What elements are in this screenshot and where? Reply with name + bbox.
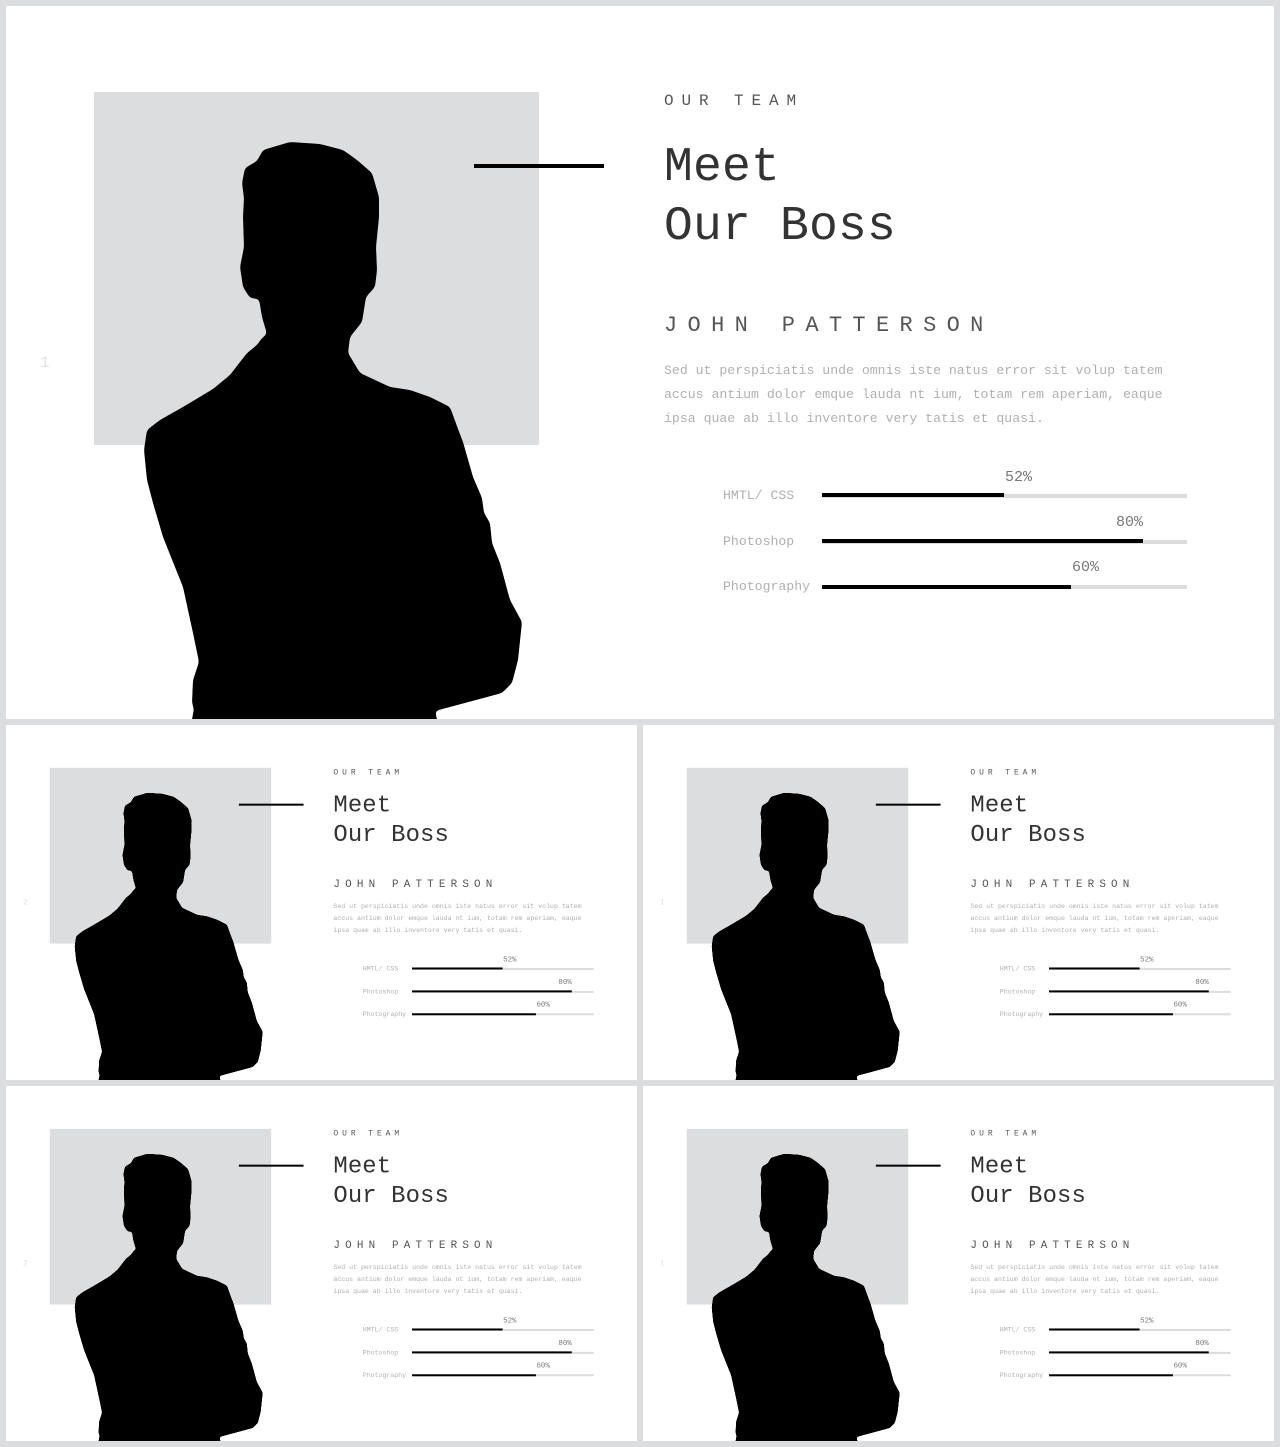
description text — [333, 903, 582, 934]
accent rule — [474, 164, 604, 168]
description text: ipsa quae ab illo inventore very tatis et quasi. — [664, 410, 1044, 426]
skill bar: Photoshop 80% — [1049, 1351, 1209, 1353]
silhouette of man — [712, 1154, 900, 1441]
skill track: Photoshop — [1049, 991, 1231, 993]
heading: Our Boss — [970, 822, 1086, 848]
grey backdrop rectangle — [687, 1129, 908, 1305]
skill label: Photoshop: Photoshop — [723, 534, 794, 549]
description text: Sed ut perspiciatis unde omnis iste natus error sit volup tatem — [970, 1264, 1219, 1271]
skill value: 80%: 80% — [1195, 978, 1209, 986]
skill track: Photography — [412, 1374, 594, 1376]
panel: small slide bottom left — [6, 1086, 637, 1441]
heading: Our Boss — [664, 200, 896, 254]
accent rule — [876, 1165, 941, 1167]
skill bar: HTML/CSS 52% — [412, 1328, 503, 1330]
panel: small slide top left — [6, 725, 637, 1080]
accent rule — [239, 804, 304, 806]
description text — [333, 1264, 582, 1295]
skill bar: Photography 60% — [1049, 1374, 1173, 1376]
description text: accus antium dolor emque lauda nt ium, totam rem aperiam, eaque — [664, 386, 1163, 402]
grey backdrop rectangle — [94, 92, 539, 445]
person name: JOHN PATTERSON — [333, 1239, 497, 1251]
skill value: 80%: 80% — [558, 1339, 572, 1347]
skill value: 80%: 80% — [558, 978, 572, 986]
skill track: HTML/CSS — [1049, 1329, 1231, 1331]
description text: accus antium dolor emque lauda nt ium, totam rem aperiam, eaque — [333, 914, 582, 922]
description text — [664, 362, 1163, 426]
skill value: 60%: 60% — [1072, 559, 1099, 576]
panel: small slide top right — [643, 725, 1274, 1080]
skill bar: HTML/CSS 52% — [1049, 1328, 1140, 1330]
heading: Meet — [664, 141, 780, 195]
skill label: Photoshop: Photoshop — [363, 988, 398, 995]
skill value: 52%: 52% — [1005, 469, 1032, 486]
skill bar: HTML/CSS 52% — [1049, 967, 1140, 969]
description text — [970, 903, 1219, 934]
skill track: HTML/CSS — [822, 494, 1187, 498]
description text: accus antium dolor emque lauda nt ium, totam rem aperiam, eaque — [970, 914, 1219, 922]
heading — [664, 141, 896, 254]
skill value: 80%: 80% — [1116, 514, 1143, 531]
skill value: 60%: 60% — [536, 1361, 550, 1370]
heading — [970, 1153, 1086, 1209]
person name: JOHN PATTERSON — [970, 1239, 1134, 1251]
page number: 2 — [23, 1259, 28, 1268]
heading: Meet — [333, 1153, 391, 1180]
skill value: 52%: 52% — [503, 956, 517, 964]
heading — [333, 792, 449, 848]
panel: small slide bottom right — [643, 1086, 1274, 1441]
skill track: Photoshop — [412, 1352, 594, 1354]
heading: Our Boss — [333, 1183, 449, 1209]
skill bar: HTML/CSS 52% — [412, 967, 503, 969]
description text: accus antium dolor emque lauda nt ium, totam rem aperiam, eaque — [333, 1275, 582, 1283]
skill bar: Photoshop 80% — [412, 1351, 572, 1353]
skill bar: Photography 60% — [412, 1013, 536, 1015]
skill track: HTML/CSS — [1049, 968, 1231, 970]
description text: Sed ut perspiciatis unde omnis iste natus error sit volup tatem — [970, 903, 1219, 910]
description text: Sed ut perspiciatis unde omnis iste natus error sit volup tatem — [333, 903, 582, 910]
skill bar: Photoshop 80% — [412, 990, 572, 992]
skill label: Photography: Photography — [723, 579, 810, 594]
skill value: 52%: 52% — [503, 1317, 517, 1325]
skill track: Photoshop — [1049, 1352, 1231, 1354]
skill value: 52%: 52% — [1140, 956, 1154, 964]
skill label: Photography: Photography — [363, 1371, 406, 1379]
heading: Meet — [333, 792, 391, 819]
accent rule — [239, 1165, 304, 1167]
grey backdrop rectangle — [687, 768, 908, 944]
heading: Meet — [970, 792, 1028, 819]
skill bar: Photography 60% — [822, 584, 1071, 588]
skill label: Photoshop: Photoshop — [1000, 988, 1035, 995]
description text: Sed ut perspiciatis unde omnis iste natus error sit volup tatem — [664, 362, 1163, 378]
silhouette of man — [74, 1154, 262, 1441]
eyebrow label: OUR TEAM — [970, 1129, 1040, 1138]
eyebrow label: OUR TEAM — [970, 768, 1040, 777]
skill track: HTML/CSS — [412, 968, 594, 970]
heading: Our Boss — [333, 822, 449, 848]
skill track: Photography — [1049, 1013, 1231, 1015]
eyebrow label: OUR TEAM — [333, 1129, 403, 1138]
skill label: Photoshop: Photoshop — [363, 1349, 398, 1356]
skill value: 60%: 60% — [536, 1000, 550, 1009]
skill track: HTML/CSS — [412, 1329, 594, 1331]
skill label: HTML/CSS: HMTL/ CSS — [363, 965, 398, 972]
skill track: Photography — [412, 1013, 594, 1015]
skill bar: Photography 60% — [412, 1374, 536, 1376]
skill bar: HTML/CSS 52% — [822, 493, 1004, 497]
description text — [970, 1264, 1219, 1295]
skill label: Photoshop: Photoshop — [1000, 1349, 1035, 1356]
page number: 1 — [660, 1259, 665, 1268]
description text: accus antium dolor emque lauda nt ium, totam rem aperiam, eaque — [970, 1275, 1219, 1283]
skill bar: Photoshop 80% — [1049, 990, 1209, 992]
skill track: Photography — [822, 585, 1187, 589]
skill label: HTML/CSS: HMTL/ CSS — [1000, 1326, 1035, 1333]
skill value: 60%: 60% — [1173, 1000, 1187, 1009]
skill label: HTML/CSS: HMTL/ CSS — [363, 1326, 398, 1333]
heading — [333, 1153, 449, 1209]
skill track: Photoshop — [822, 540, 1187, 544]
silhouette of man — [712, 792, 900, 1080]
panel: main slide — [6, 6, 1274, 719]
silhouette of man — [74, 792, 262, 1080]
heading — [970, 792, 1086, 848]
description text: ipsa quae ab illo inventore very tatis et quasi. — [970, 1287, 1159, 1295]
accent rule — [876, 804, 941, 806]
skill label: HTML/CSS: HMTL/ CSS — [1000, 965, 1035, 972]
page number: 2 — [23, 898, 28, 907]
description text: ipsa quae ab illo inventore very tatis et quasi. — [970, 926, 1159, 934]
heading: Our Boss — [970, 1183, 1086, 1209]
description text: ipsa quae ab illo inventore very tatis et quasi. — [333, 926, 522, 934]
skill label: Photography: Photography — [363, 1010, 406, 1018]
description text: ipsa quae ab illo inventore very tatis et quasi. — [333, 1287, 522, 1295]
person name: JOHN PATTERSON — [664, 313, 994, 338]
skill label: Photography: Photography — [1000, 1371, 1043, 1379]
skill value: 52%: 52% — [1140, 1317, 1154, 1325]
heading: Meet — [970, 1153, 1028, 1180]
grey backdrop rectangle — [50, 768, 271, 944]
silhouette of man — [144, 142, 522, 719]
person name: JOHN PATTERSON — [333, 878, 497, 890]
page number: 1 — [40, 354, 50, 372]
skill value: 80%: 80% — [1195, 1339, 1209, 1347]
eyebrow label: OUR TEAM — [664, 92, 804, 110]
skill label: HTML/CSS: HMTL/ CSS — [723, 488, 794, 503]
skill bar: Photoshop 80% — [822, 539, 1143, 543]
skill track: Photography — [1049, 1374, 1231, 1376]
skill label: Photography: Photography — [1000, 1010, 1043, 1018]
skill value: 60%: 60% — [1173, 1361, 1187, 1370]
page number: 1 — [660, 898, 665, 907]
description text: Sed ut perspiciatis unde omnis iste natus error sit volup tatem — [333, 1264, 582, 1271]
grey backdrop rectangle — [50, 1129, 271, 1305]
skill track: Photoshop — [412, 991, 594, 993]
person name: JOHN PATTERSON — [970, 878, 1134, 890]
eyebrow label: OUR TEAM — [333, 768, 403, 777]
skill bar: Photography 60% — [1049, 1013, 1173, 1015]
